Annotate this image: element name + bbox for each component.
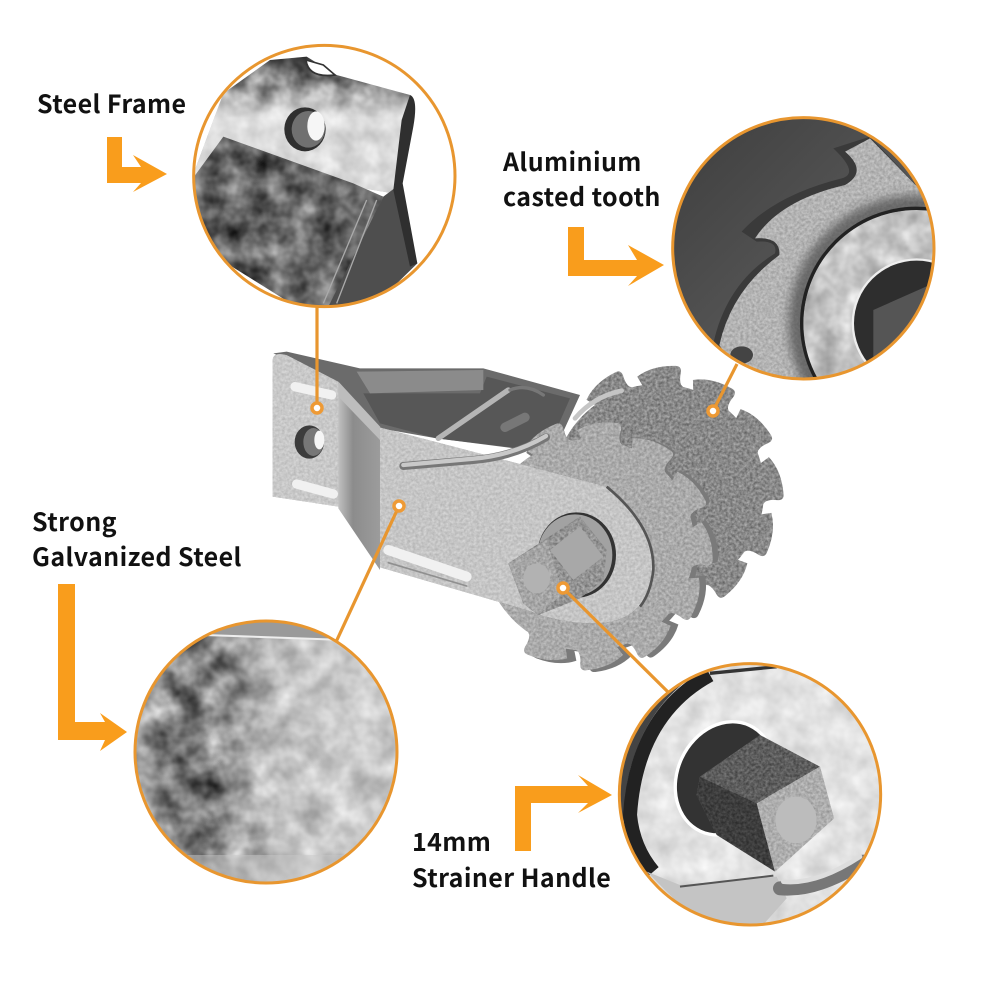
leader line: strainer handle bbox=[558, 583, 668, 692]
front ratchet wheel bbox=[482, 412, 727, 678]
rear pins bbox=[438, 388, 622, 438]
strainer handle bbox=[508, 512, 616, 615]
leader line: steel frame bbox=[312, 306, 322, 413]
central product: wire strainer bbox=[273, 352, 785, 678]
frame embossed ribs bbox=[295, 387, 467, 586]
leader line: galvanized steel bbox=[336, 501, 404, 642]
label: 14mm strainer handle: Strainer Handle bbox=[412, 859, 611, 895]
arrow: steel frame bbox=[107, 137, 167, 192]
leader line: aluminium tooth bbox=[708, 364, 737, 416]
detail circle: galvanized steel bbox=[130, 615, 405, 890]
arrow: strainer handle bbox=[515, 775, 612, 851]
label: aluminium casted tooth: casted tooth bbox=[503, 178, 661, 214]
rear ratchet wheel bbox=[552, 361, 785, 619]
label: strong galvanized steel: Galvanized Steel bbox=[32, 538, 242, 574]
label: aluminium casted tooth: Aluminium bbox=[503, 143, 642, 179]
frame hole bbox=[295, 425, 324, 459]
label: strong galvanized steel: Strong bbox=[32, 503, 117, 539]
label: 14mm strainer handle: 14mm bbox=[412, 823, 491, 859]
front frame: ear, bevel, main plate bbox=[273, 354, 653, 623]
label: steel frame: Steel Frame bbox=[37, 85, 186, 121]
arrow: galvanized steel bbox=[58, 584, 127, 751]
wire handle bbox=[403, 436, 546, 466]
arrow: aluminium tooth bbox=[568, 227, 664, 286]
detail circle: aluminium tooth bbox=[671, 116, 936, 380]
detail circle: steel frame bbox=[192, 44, 456, 308]
detail circle: strainer handle bbox=[618, 662, 882, 926]
rear frame plate bbox=[273, 352, 580, 453]
